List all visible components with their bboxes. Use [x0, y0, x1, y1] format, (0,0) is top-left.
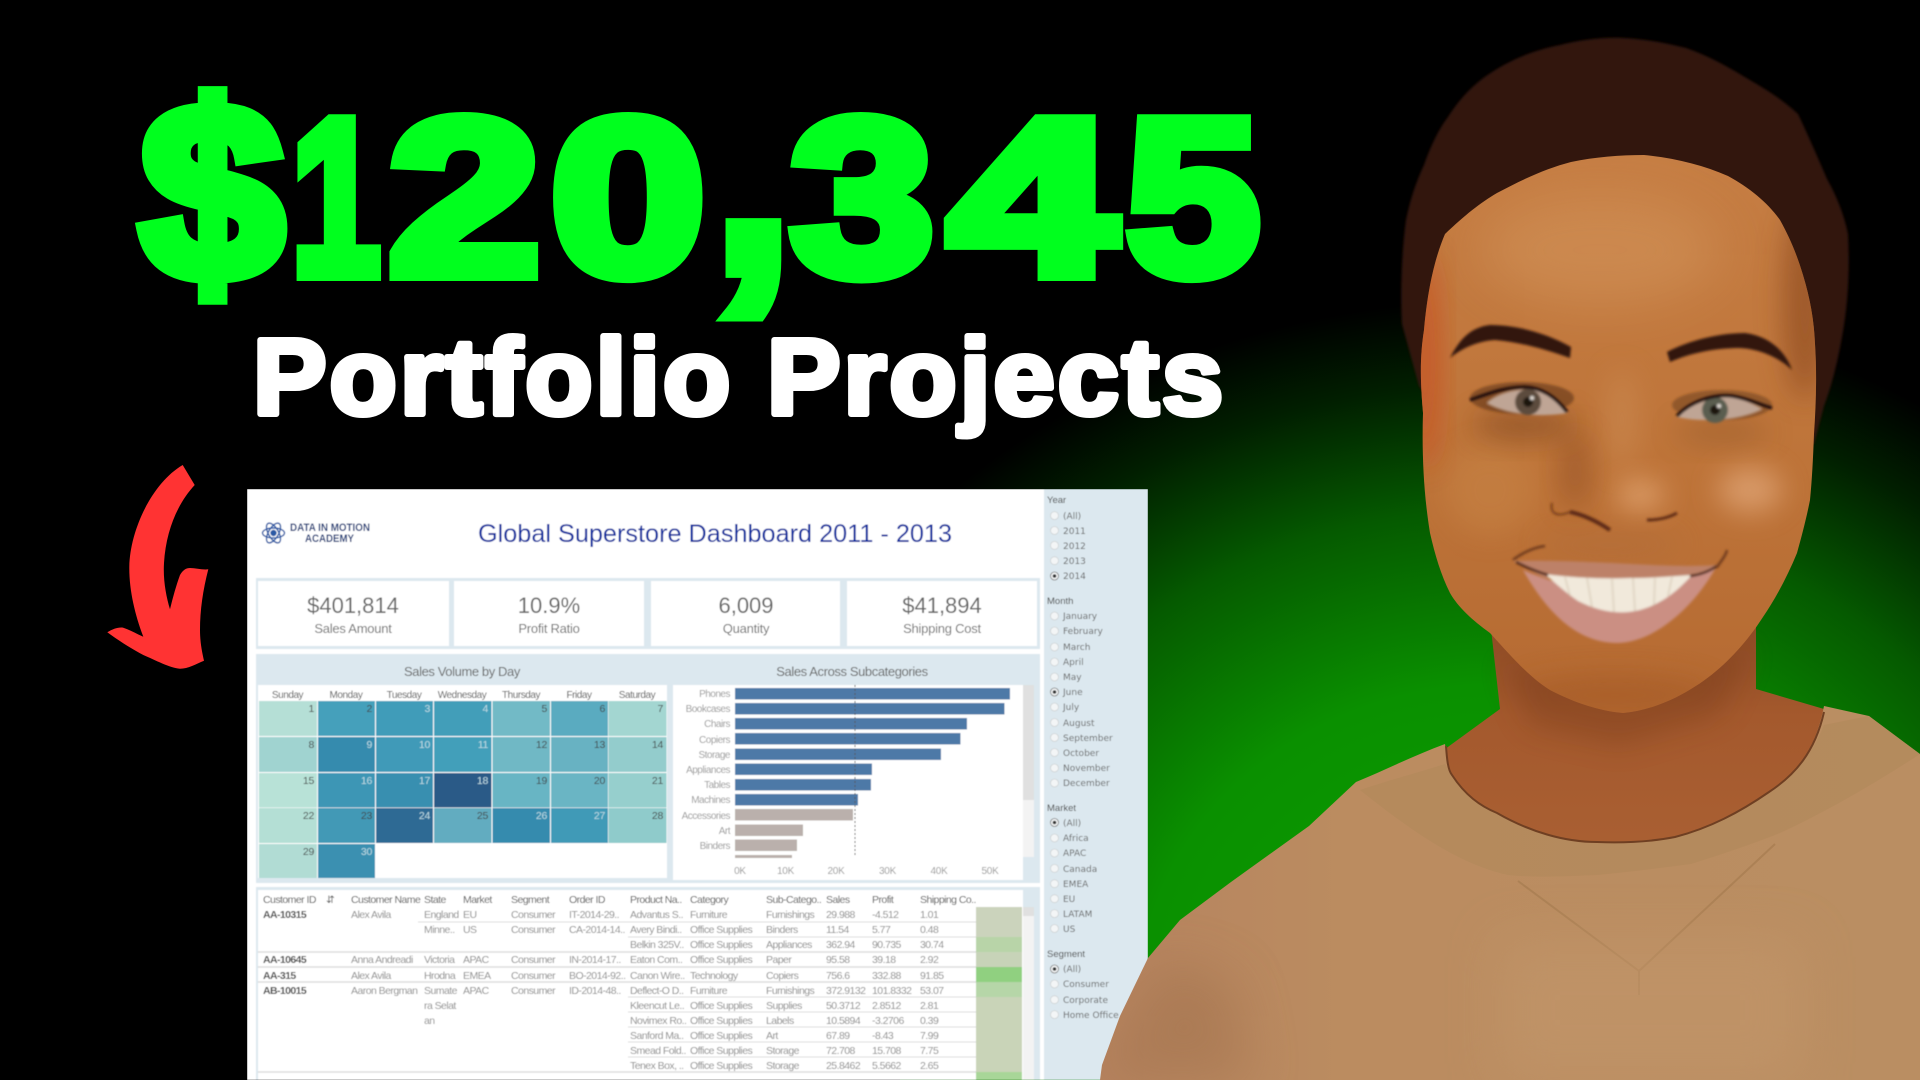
- table header: Shipping Co..: [920, 894, 976, 906]
- filter: year: (All): [1063, 512, 1081, 522]
- scrollbar: [1023, 685, 1034, 857]
- row AA-315: 332.88: [872, 970, 902, 982]
- row AB-10015: 53.07: [920, 985, 944, 997]
- filter: month: December: [1063, 779, 1110, 789]
- headline: $120,345: 3: [790, 73, 934, 321]
- logo text: DATA IN MOTION: [290, 522, 370, 534]
- calendar heatmap: sales volume by day: Thursday: [502, 690, 540, 701]
- filter: month: February: [1063, 627, 1104, 637]
- table header: Market: [463, 894, 492, 906]
- table header: Order ID: [569, 894, 606, 906]
- row AB-10015: 67.89: [826, 1030, 850, 1042]
- eye right: [1672, 390, 1772, 423]
- calendar heatmap: sales volume by day: 21: [652, 775, 663, 787]
- KPI: shipping cost: [847, 581, 1037, 646]
- row AB-10015: 2.8512: [872, 1000, 902, 1012]
- row AA-10645: AA-10645: [263, 954, 307, 966]
- calendar heatmap: sales volume by day: 11: [478, 739, 488, 751]
- filter: month: August: [1063, 719, 1095, 729]
- row AB-10015: Office Supplies: [690, 1030, 752, 1042]
- sales colour column: [976, 907, 1022, 1080]
- row AA-10315: 29.988: [826, 909, 856, 921]
- nose: [1552, 503, 1677, 530]
- filter: month: Month: [1047, 596, 1073, 607]
- KPI: quantity: 6,009: [718, 593, 774, 618]
- table header: State: [424, 894, 446, 906]
- row AA-315: Canon Wire..: [630, 970, 685, 982]
- row AA-10645: APAC: [463, 954, 490, 966]
- row AA-10315: England: [424, 909, 459, 921]
- row AA-10315: Belkin 325V..: [630, 939, 684, 951]
- row AA-10315: Consumer: [511, 924, 556, 936]
- calendar heatmap: sales volume by day: Sunday: [272, 690, 304, 701]
- filter: month: July: [1062, 703, 1080, 713]
- face: [1421, 155, 1816, 713]
- calendar heatmap: sales volume by day: 14: [652, 739, 663, 751]
- KPI: sales amount: Sales Amount: [314, 621, 392, 636]
- row AA-10315: Advantus S..: [630, 909, 683, 921]
- calendar heatmap: sales volume by day: 18: [477, 775, 488, 787]
- headline: $120,345: 0: [551, 74, 705, 322]
- calendar heatmap: sales volume by day: [258, 664, 667, 878]
- calendar heatmap: sales volume by day: 5: [541, 703, 547, 715]
- row AB-10015: 0.39: [920, 1015, 939, 1027]
- headline: $120,345: ,: [715, 14, 791, 329]
- sweater: [1100, 706, 1920, 1080]
- row AB-10015: Office Supplies: [690, 1045, 752, 1057]
- row AA-315: 756.6: [826, 970, 850, 982]
- row AB-10015: ID-2014-48..: [569, 985, 621, 997]
- row AA-315: Alex Avila: [351, 970, 392, 982]
- calendar heatmap: sales volume by day: 24: [419, 810, 430, 822]
- row AA-10315: [263, 909, 944, 951]
- table header: Sub-Catego..: [766, 894, 821, 906]
- arrow: red pointing down to dashboard: [107, 465, 208, 669]
- calendar heatmap: sales volume by day: Tuesday: [387, 690, 422, 701]
- row AB-10015: 5.5662: [872, 1060, 902, 1072]
- row AA-10315: 90.735: [872, 939, 902, 951]
- row AB-10015: AB-10015: [263, 985, 307, 997]
- green radial glow: [900, 250, 1920, 1080]
- row AB-10015: APAC: [463, 985, 490, 997]
- row AA-10315: 362.94: [826, 939, 856, 951]
- row AB-10015: 15.708: [872, 1045, 902, 1057]
- filter: market: APAC: [1063, 849, 1086, 859]
- row AA-315: Technology: [690, 970, 739, 982]
- row AA-10315: Appliances: [766, 939, 812, 951]
- filter: segment: Home Office: [1063, 1011, 1119, 1021]
- row AB-10015: 2.81: [920, 1000, 939, 1012]
- bar chart: sales across subcategories: Sales Across Subcategories: [776, 664, 929, 679]
- row AA-315: Copiers: [766, 970, 799, 982]
- row AA-10315: US: [463, 924, 477, 936]
- row AB-10015: 101.8332: [872, 985, 912, 997]
- row separators: [258, 922, 976, 1072]
- row AB-10015: Office Supplies: [690, 1015, 752, 1027]
- row AB-10015: 7.75: [920, 1045, 939, 1057]
- filter: segment: [1047, 949, 1119, 1021]
- table header: ⇵: [326, 894, 335, 906]
- row AA-10315: 30.74: [920, 939, 944, 951]
- row AA-315: BO-2014-92..: [569, 970, 625, 982]
- row AA-10315: Avery Bindi..: [630, 924, 682, 936]
- eyebrow left: [1450, 325, 1571, 358]
- row AB-10015: [263, 985, 944, 1072]
- table header: [263, 894, 976, 906]
- calendar heatmap: sales volume by day: 13: [594, 739, 605, 751]
- row AA-10315: Furnishings: [766, 909, 815, 921]
- filter: year: 2014: [1063, 572, 1086, 582]
- bar chart: sales across subcategories: Copiers: [699, 735, 730, 746]
- bar chart: sales across subcategories: 50K: [982, 866, 999, 877]
- bar chart: sales across subcategories: 10K: [777, 866, 795, 877]
- filter: year: 2013: [1063, 557, 1086, 567]
- KPI: profit ratio: [454, 581, 644, 646]
- person: smiling woman in tan sweater: [1100, 38, 1920, 1080]
- row AB-10015: Aaron Bergman: [351, 985, 418, 997]
- filter: market: EU: [1063, 895, 1075, 905]
- bar chart: sales across subcategories: Binders: [700, 841, 730, 852]
- bar chart: sales across subcategories: [673, 664, 1034, 880]
- bar chart: sales across subcategories: Storage: [698, 750, 731, 761]
- row AB-10015: 7.99: [920, 1030, 939, 1042]
- filter: market: Africa: [1063, 834, 1089, 844]
- row AB-10015: Art: [766, 1030, 778, 1042]
- row AA-10315: AA-10315: [263, 909, 307, 921]
- row AB-10015: Labels: [766, 1015, 794, 1027]
- bar chart: sales across subcategories: 20K: [828, 866, 845, 877]
- row AA-315: EMEA: [463, 970, 491, 982]
- filter: segment: Segment: [1047, 949, 1085, 960]
- calendar heatmap: sales volume by day: Sales Volume by Day: [404, 664, 521, 679]
- headline: $120,345: 5: [1126, 73, 1260, 321]
- KPI: quantity: [651, 581, 840, 646]
- headline: $120,345: [141, 14, 1260, 332]
- row AA-10315: Office Supplies: [690, 924, 752, 936]
- row AA-10315: Alex Avila: [351, 909, 392, 921]
- row AA-315: [263, 970, 944, 982]
- calendar heatmap: sales volume by day: 10: [419, 739, 430, 751]
- table header: Segment: [511, 894, 550, 906]
- eyebrow right: [1667, 333, 1792, 370]
- sweater shoulder shading: [1107, 947, 1666, 1070]
- bar chart: sales across subcategories: Art: [719, 826, 731, 837]
- face shading: [1413, 195, 1827, 715]
- calendar heatmap: sales volume by day: 4: [482, 703, 488, 715]
- row AB-10015: 2.65: [920, 1060, 939, 1072]
- row AB-10015: Office Supplies: [690, 1060, 752, 1072]
- dashboard title: Global Superstore Dashboard 2011 - 2013: [478, 520, 952, 548]
- row AB-10015: Storage: [766, 1045, 800, 1057]
- hair: [1401, 38, 1849, 500]
- headline: $120,345: $: [141, 55, 283, 332]
- filter: month: March: [1063, 643, 1090, 653]
- bar chart: sales across subcategories: Accessories: [682, 811, 730, 822]
- row AA-10645: 95.58: [826, 954, 850, 966]
- calendar heatmap: sales volume by day: Monday: [330, 690, 363, 701]
- row AB-10015: -3.2706: [872, 1015, 904, 1027]
- row AB-10015: Office Supplies: [690, 1000, 752, 1012]
- dashboard title row: [262, 520, 952, 548]
- neck shadow under chin: [1505, 650, 1750, 745]
- row AA-10645: Eaton Com..: [630, 954, 682, 966]
- row AA-10645: Paper: [766, 954, 792, 966]
- KPI: profit ratio: Profit Ratio: [518, 621, 580, 636]
- row AA-10315: Furniture: [690, 909, 728, 921]
- row AA-315: 91.85: [920, 970, 944, 982]
- row AA-315: Hrodna: [424, 970, 456, 982]
- row AB-10015: Sumate: [424, 985, 458, 997]
- bar chart: sales across subcategories: Tables: [704, 780, 730, 791]
- filter: month: October: [1063, 749, 1099, 759]
- KPI: sales amount: [258, 581, 449, 646]
- calendar heatmap: sales volume by day: 3: [424, 703, 430, 715]
- row AA-10315: Minne..: [424, 924, 455, 936]
- row AA-10645: 39.18: [872, 954, 896, 966]
- filter: market: [1047, 803, 1097, 935]
- tooth gaps: [1565, 577, 1672, 612]
- charts band: [256, 654, 1040, 883]
- table header: Category: [690, 894, 730, 906]
- row AB-10015: 25.8462: [826, 1060, 861, 1072]
- smile lines: [1513, 546, 1727, 567]
- filter: month: June: [1062, 688, 1083, 698]
- row AB-10015: Sanford Ma..: [630, 1030, 684, 1042]
- bar chart: sales across subcategories: Machines: [691, 795, 730, 806]
- row AA-10315: Consumer: [511, 909, 556, 921]
- filter: segment: Consumer: [1063, 980, 1109, 990]
- KPI: profit ratio: 10.9%: [518, 593, 580, 618]
- KPI: shipping cost: Shipping Cost: [903, 621, 981, 636]
- row AA-10645: Victoria: [424, 954, 455, 966]
- row AB-10015: Tenex Box, ..: [630, 1060, 684, 1072]
- row AA-10315: 0.48: [920, 924, 939, 936]
- row AA-10315: 11.54: [826, 924, 849, 936]
- calendar heatmap: sales volume by day: 12: [536, 739, 547, 751]
- row AB-10015: -8.43: [872, 1030, 894, 1042]
- headline: $120,345: 2: [389, 73, 540, 321]
- filter: year: 2012: [1063, 542, 1086, 552]
- neck: [1430, 620, 1840, 860]
- calendar heatmap: sales volume by day: 19: [536, 775, 547, 787]
- calendar heatmap: sales volume by day: 30: [361, 846, 372, 858]
- bar chart: sales across subcategories: 40K: [931, 866, 948, 877]
- filter: month: November: [1063, 764, 1110, 774]
- sweater collar band: [1360, 716, 1920, 877]
- bar chart: sales across subcategories: Phones: [699, 689, 730, 700]
- calendar heatmap: sales volume by day: 25: [477, 810, 488, 822]
- bar chart: sales across subcategories: 0K: [734, 866, 746, 877]
- filter: market: (All): [1063, 819, 1081, 829]
- row AB-10015: an: [424, 1015, 435, 1027]
- calendar heatmap: sales volume by day: 28: [652, 810, 663, 822]
- row AA-10645: [263, 954, 939, 966]
- filter: market: LATAM: [1063, 910, 1092, 920]
- calendar heatmap: sales volume by day: 9: [366, 739, 372, 751]
- dashboard screenshot: [247, 489, 1148, 1080]
- row AB-10015: 10.5894: [826, 1015, 861, 1027]
- KPI: quantity: Quantity: [723, 621, 770, 636]
- subheading: Portfolio Projects: Portfolio Projects: [253, 317, 1226, 438]
- row AA-315: AA-315: [263, 970, 296, 982]
- table header: Sales: [826, 894, 850, 906]
- table scrollbar: [1023, 907, 1034, 1080]
- table header: Customer Name: [351, 894, 421, 906]
- upper lip: [1513, 561, 1717, 582]
- headline: $120,345: 1: [292, 73, 380, 321]
- calendar heatmap: sales volume by day: 2: [366, 703, 372, 715]
- filter: market: EMEA: [1063, 880, 1089, 890]
- calendar heatmap: sales volume by day: 7: [657, 703, 663, 715]
- calendar heatmap: sales volume by day: 23: [361, 810, 372, 822]
- table header: Product Na..: [630, 894, 682, 906]
- calendar heatmap: sales volume by day: 27: [594, 810, 605, 822]
- row AA-10315: 1.01: [920, 909, 939, 921]
- logo text: [290, 522, 370, 545]
- filter: segment: Corporate: [1063, 996, 1108, 1006]
- lower lip: [1523, 569, 1715, 643]
- row AB-10015: Consumer: [511, 985, 556, 997]
- table header: Profit: [872, 894, 894, 906]
- calendar heatmap: sales volume by day: 6: [599, 703, 605, 715]
- row AA-10645: 2.92: [920, 954, 939, 966]
- filter: segment: (All): [1063, 965, 1081, 975]
- filter: month: April: [1063, 658, 1084, 668]
- filter: year: 2011: [1063, 527, 1086, 537]
- logo text: ACADEMY: [305, 533, 355, 545]
- filter: year: Year: [1047, 495, 1066, 506]
- calendar heatmap: sales volume by day: 29: [303, 846, 314, 858]
- teeth: [1545, 574, 1692, 612]
- calendar heatmap: sales volume by day: 22: [303, 810, 314, 822]
- row AB-10015: Supplies: [766, 1000, 802, 1012]
- calendar heatmap: sales volume by day: Wednesday: [438, 690, 487, 701]
- sweater V seam: [1518, 844, 1775, 995]
- calendar heatmap: sales volume by day: 26: [536, 810, 547, 822]
- row AA-10315: -4.512: [872, 909, 899, 921]
- logo: atom icon: [262, 521, 284, 545]
- row AB-10015: Deflect-O D..: [630, 985, 684, 997]
- filter: market: Market: [1047, 803, 1076, 814]
- row AA-10315: EU: [463, 909, 476, 921]
- KPI: sales amount: $401,814: [307, 593, 399, 618]
- filter sidebar: [1044, 489, 1148, 1080]
- filter: market: US: [1063, 925, 1076, 935]
- row AB-10015: Storage: [766, 1060, 800, 1072]
- row AB-10015: 372.9132: [826, 985, 866, 997]
- row AA-10315: Binders: [766, 924, 798, 936]
- row AA-10645: IN-2014-17..: [569, 954, 621, 966]
- calendar heatmap: sales volume by day: 15: [303, 775, 314, 787]
- eye left: [1470, 382, 1574, 415]
- row AA-10645: Anna Andreadi: [351, 954, 413, 966]
- row AA-10645: Consumer: [511, 954, 556, 966]
- KPI: shipping cost: $41,894: [902, 593, 982, 618]
- calendar heatmap: sales volume by day: Friday: [566, 690, 592, 701]
- calendar heatmap: sales volume by day: Saturday: [619, 690, 656, 701]
- calendar heatmap: sales volume by day: 16: [361, 775, 372, 787]
- row AA-10315: IT-2014-29..: [569, 909, 619, 921]
- bar chart: sales across subcategories: Chairs: [704, 719, 730, 730]
- neckline shadow: [1446, 712, 1824, 842]
- filter: month: [1047, 596, 1113, 789]
- calendar heatmap: sales volume by day: 8: [308, 739, 314, 751]
- mouth corner shadow: [1516, 562, 1717, 576]
- row AA-10645: Office Supplies: [690, 954, 752, 966]
- row AB-10015: 72.708: [826, 1045, 856, 1057]
- filter: month: September: [1063, 734, 1113, 744]
- row AB-10015: Furniture: [690, 985, 728, 997]
- row AB-10015: Smead Fold..: [630, 1045, 686, 1057]
- bar chart: sales across subcategories: 30K: [879, 866, 897, 877]
- filter: year: [1047, 495, 1086, 582]
- row AA-10315: 5.77: [872, 924, 891, 936]
- table header: Customer ID: [263, 894, 317, 906]
- row AB-10015: Furnishings: [766, 985, 815, 997]
- filter: market: Canada: [1063, 865, 1097, 875]
- KPI band: [256, 578, 1040, 649]
- bar chart: sales across subcategories: Bookcases: [686, 704, 730, 715]
- detail table: [256, 887, 1040, 1080]
- row AB-10015: Kleencut Le..: [630, 1000, 684, 1012]
- filter: month: January: [1062, 612, 1098, 622]
- row AA-10315: CA-2014-14..: [569, 924, 625, 936]
- row AA-315: Consumer: [511, 970, 556, 982]
- calendar heatmap: sales volume by day: 17: [419, 775, 430, 787]
- calendar heatmap: sales volume by day: 1: [308, 703, 314, 715]
- row AB-10015: ra Selat: [424, 1000, 456, 1012]
- row AB-10015: Novimex Ro..: [630, 1015, 686, 1027]
- filter: month: May: [1063, 673, 1082, 683]
- row AA-10315: Office Supplies: [690, 939, 752, 951]
- row AB-10015: 50.3712: [826, 1000, 861, 1012]
- calendar heatmap: sales volume by day: 20: [594, 775, 605, 787]
- bar chart: sales across subcategories: Appliances: [686, 765, 730, 776]
- headline: $120,345: 4: [949, 73, 1117, 321]
- mouth: [1513, 561, 1717, 643]
